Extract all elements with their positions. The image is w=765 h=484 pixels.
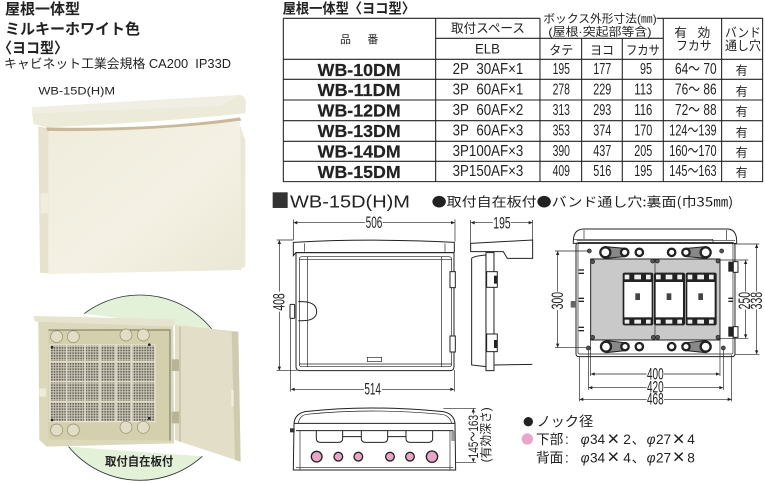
pink dot legend: 下部 — [536, 432, 564, 447]
specification table — [283, 1, 763, 182]
dimension 420: 420 — [647, 378, 664, 397]
table row WB-11DM: 229 — [593, 82, 611, 99]
pink dot legend: 2 — [623, 432, 631, 447]
table row WB-15DM — [318, 162, 748, 182]
table row WB-15DM: 195 — [634, 163, 652, 180]
table row WB-12DM: 72〜 88 — [675, 102, 717, 119]
table header: 通し穴 — [725, 39, 761, 53]
table row WB-11DM: WB-11DM — [318, 80, 401, 100]
table row WB-12DM — [318, 101, 748, 121]
heading: product series — [0, 1, 231, 71]
side view drawing — [471, 214, 533, 371]
table row WB-11DM — [318, 80, 748, 100]
heading: product series: 屋根一体型 — [5, 1, 80, 18]
bottom view drawing — [290, 407, 493, 470]
table row WB-10DM: WB-10DM — [318, 60, 401, 80]
table row WB-13DM: 374 — [593, 123, 612, 140]
pink dot legend: 27 — [656, 432, 671, 447]
front view drawing — [270, 213, 455, 399]
effective depth dimension: (有効深さ) — [479, 407, 493, 462]
heading: product series: キャビネット工業会規格 CA200 IP33D — [4, 56, 231, 71]
dimension 300 — [548, 251, 588, 348]
table header: ELB — [475, 41, 500, 57]
dimension 420 — [588, 349, 723, 397]
table header: 品 番 — [340, 33, 378, 46]
table row WB-15DM: WB-15DM — [318, 162, 401, 182]
screws — [586, 249, 725, 350]
rear note: φ — [581, 450, 590, 465]
width dimension 514 — [291, 318, 454, 399]
rear note: : — [565, 450, 569, 465]
photo: closed cabinet — [32, 86, 246, 274]
table row WB-14DM: 437 — [593, 143, 611, 160]
height dimension 408: 408 — [270, 293, 289, 311]
black dot legend: ノック径 — [537, 414, 593, 430]
knockouts top — [600, 247, 711, 258]
width dimension 506 — [293, 213, 455, 242]
table row WB-10DM: 2P 30AF×1 — [453, 61, 523, 78]
dimension 300: 300 — [548, 292, 567, 309]
table row WB-14DM: 有 — [736, 146, 748, 160]
rear note: φ — [647, 450, 656, 465]
rear note: 、 — [632, 450, 645, 465]
knockouts bottom — [601, 341, 711, 353]
table row WB-15DM: 409 — [553, 163, 570, 180]
table header: バンド — [725, 26, 761, 40]
table row WB-11DM: 3P 60AF×1 — [453, 82, 523, 99]
pink dot legend — [522, 427, 695, 450]
table row WB-13DM: 353 — [553, 123, 570, 140]
table header: 有 効 — [674, 26, 710, 40]
heading: product series: ミルキーホワイト色 — [5, 20, 140, 38]
table row WB-12DM: 293 — [593, 102, 611, 119]
pink dot legend: × — [607, 427, 619, 450]
knockouts — [51, 329, 149, 436]
table row WB-15DM: 516 — [593, 163, 611, 180]
table header: タテ — [549, 44, 573, 58]
breaker 2 — [654, 273, 685, 325]
table row WB-14DM: 160〜170 — [669, 143, 717, 160]
table row WB-13DM — [318, 121, 748, 141]
mesh mounting plate — [50, 343, 155, 422]
drawing section heading: ●取付自在板付●バンド通し穴:裏面(巾35㎜) — [432, 192, 733, 211]
dimension 468 — [579, 355, 732, 409]
dimension 400: 400 — [647, 364, 664, 383]
pink dot legend: 4 — [687, 432, 695, 447]
table row WB-10DM: 95 — [640, 61, 652, 78]
pink dot legend: × — [673, 427, 685, 450]
table row WB-12DM: 有 — [736, 105, 748, 119]
table row WB-10DM: 有 — [736, 64, 748, 78]
rear note: 34 — [590, 450, 606, 465]
rear note: 27 — [656, 450, 671, 465]
table row WB-11DM: 278 — [553, 82, 570, 99]
table title: 屋根一体型〈ヨコ型〉 — [283, 1, 415, 17]
depth dimension 195 — [471, 214, 533, 243]
table row WB-14DM: 205 — [634, 143, 652, 160]
rear note: × — [673, 446, 685, 469]
table row WB-14DM — [318, 141, 748, 161]
dimension 468: 468 — [647, 390, 664, 409]
table row WB-13DM: WB-13DM — [318, 121, 401, 141]
effective depth dimension: 145〜163 — [465, 415, 481, 458]
table row WB-10DM: 195 — [553, 61, 570, 78]
rear note: 背面 — [536, 450, 563, 465]
pink dot legend: 、 — [632, 432, 645, 447]
dimension 400 — [591, 338, 720, 383]
table row WB-10DM: 64〜 70 — [675, 61, 717, 78]
table row WB-15DM: 3P150AF×3 — [453, 163, 523, 180]
depth dimension 195: 195 — [493, 214, 511, 233]
rear note: × — [607, 446, 619, 469]
pink dot legend: 34 — [590, 432, 606, 447]
drawing section heading: WB-15D(H)M — [290, 191, 410, 211]
table row WB-10DM: 177 — [593, 61, 611, 78]
table header: (屋根·突起部等含) — [548, 25, 652, 39]
table row WB-11DM: 113 — [634, 82, 652, 99]
table row WB-14DM: 3P100AF×3 — [453, 143, 523, 160]
table header: ヨコ — [590, 44, 614, 58]
heading: product series: 〈ヨコ型〉 — [0, 40, 68, 57]
table grid — [283, 18, 763, 182]
table row WB-11DM: 有 — [736, 84, 748, 98]
table row WB-12DM: 3P 60AF×2 — [453, 102, 523, 119]
table row WB-12DM: WB-12DM — [318, 101, 401, 121]
table row WB-14DM: WB-14DM — [318, 141, 401, 161]
rear note: 8 — [687, 450, 695, 465]
table row WB-13DM: 有 — [736, 125, 748, 139]
open door — [175, 325, 241, 462]
table header: ボックス外形寸法(㎜) — [543, 11, 657, 25]
effective depth dimension — [443, 407, 493, 462]
knockout diameter notes — [522, 414, 695, 469]
pink dot legend: : — [565, 432, 569, 447]
dimension 250 — [720, 260, 754, 338]
table header — [340, 11, 761, 58]
breaker 3 — [686, 273, 717, 325]
table row WB-10DM — [318, 60, 748, 80]
knockout holes pink — [311, 451, 438, 462]
width dimension 514: 514 — [364, 380, 381, 399]
drawing section heading — [273, 191, 733, 211]
table row WB-15DM: 145〜163 — [669, 163, 717, 180]
table row WB-13DM: 3P 60AF×3 — [453, 123, 523, 140]
rear note: 4 — [623, 450, 631, 465]
breaker 1 — [623, 273, 653, 325]
mounting plate — [591, 259, 720, 340]
width dimension 506: 506 — [366, 213, 382, 232]
height dimension 408 — [270, 240, 297, 371]
green circular background — [47, 295, 233, 480]
table header: フカサ — [626, 44, 660, 58]
dimension 250: 250 — [735, 292, 754, 309]
pink dot legend: φ — [647, 432, 656, 447]
table row WB-12DM: 116 — [634, 102, 652, 119]
side hinges and latch — [571, 262, 738, 337]
caption on circle: 取付自在板付 — [105, 454, 174, 468]
table header: 取付スペース — [451, 22, 525, 36]
table row WB-14DM: 390 — [553, 143, 570, 160]
photo caption: WB-15D(H)M — [38, 86, 115, 98]
table row WB-13DM: 170 — [634, 123, 652, 140]
rear interior drawing — [548, 229, 765, 409]
table row WB-12DM: 313 — [553, 102, 570, 119]
table row WB-13DM: 124〜139 — [669, 123, 717, 140]
table row WB-11DM: 76〜 86 — [675, 82, 717, 99]
pink dot legend: φ — [581, 432, 590, 447]
table header: フカサ — [676, 39, 712, 53]
dimension 338 — [735, 244, 765, 354]
photo: opened cabinet with mounting plate — [27, 295, 253, 480]
table row WB-15DM: 有 — [736, 166, 748, 180]
